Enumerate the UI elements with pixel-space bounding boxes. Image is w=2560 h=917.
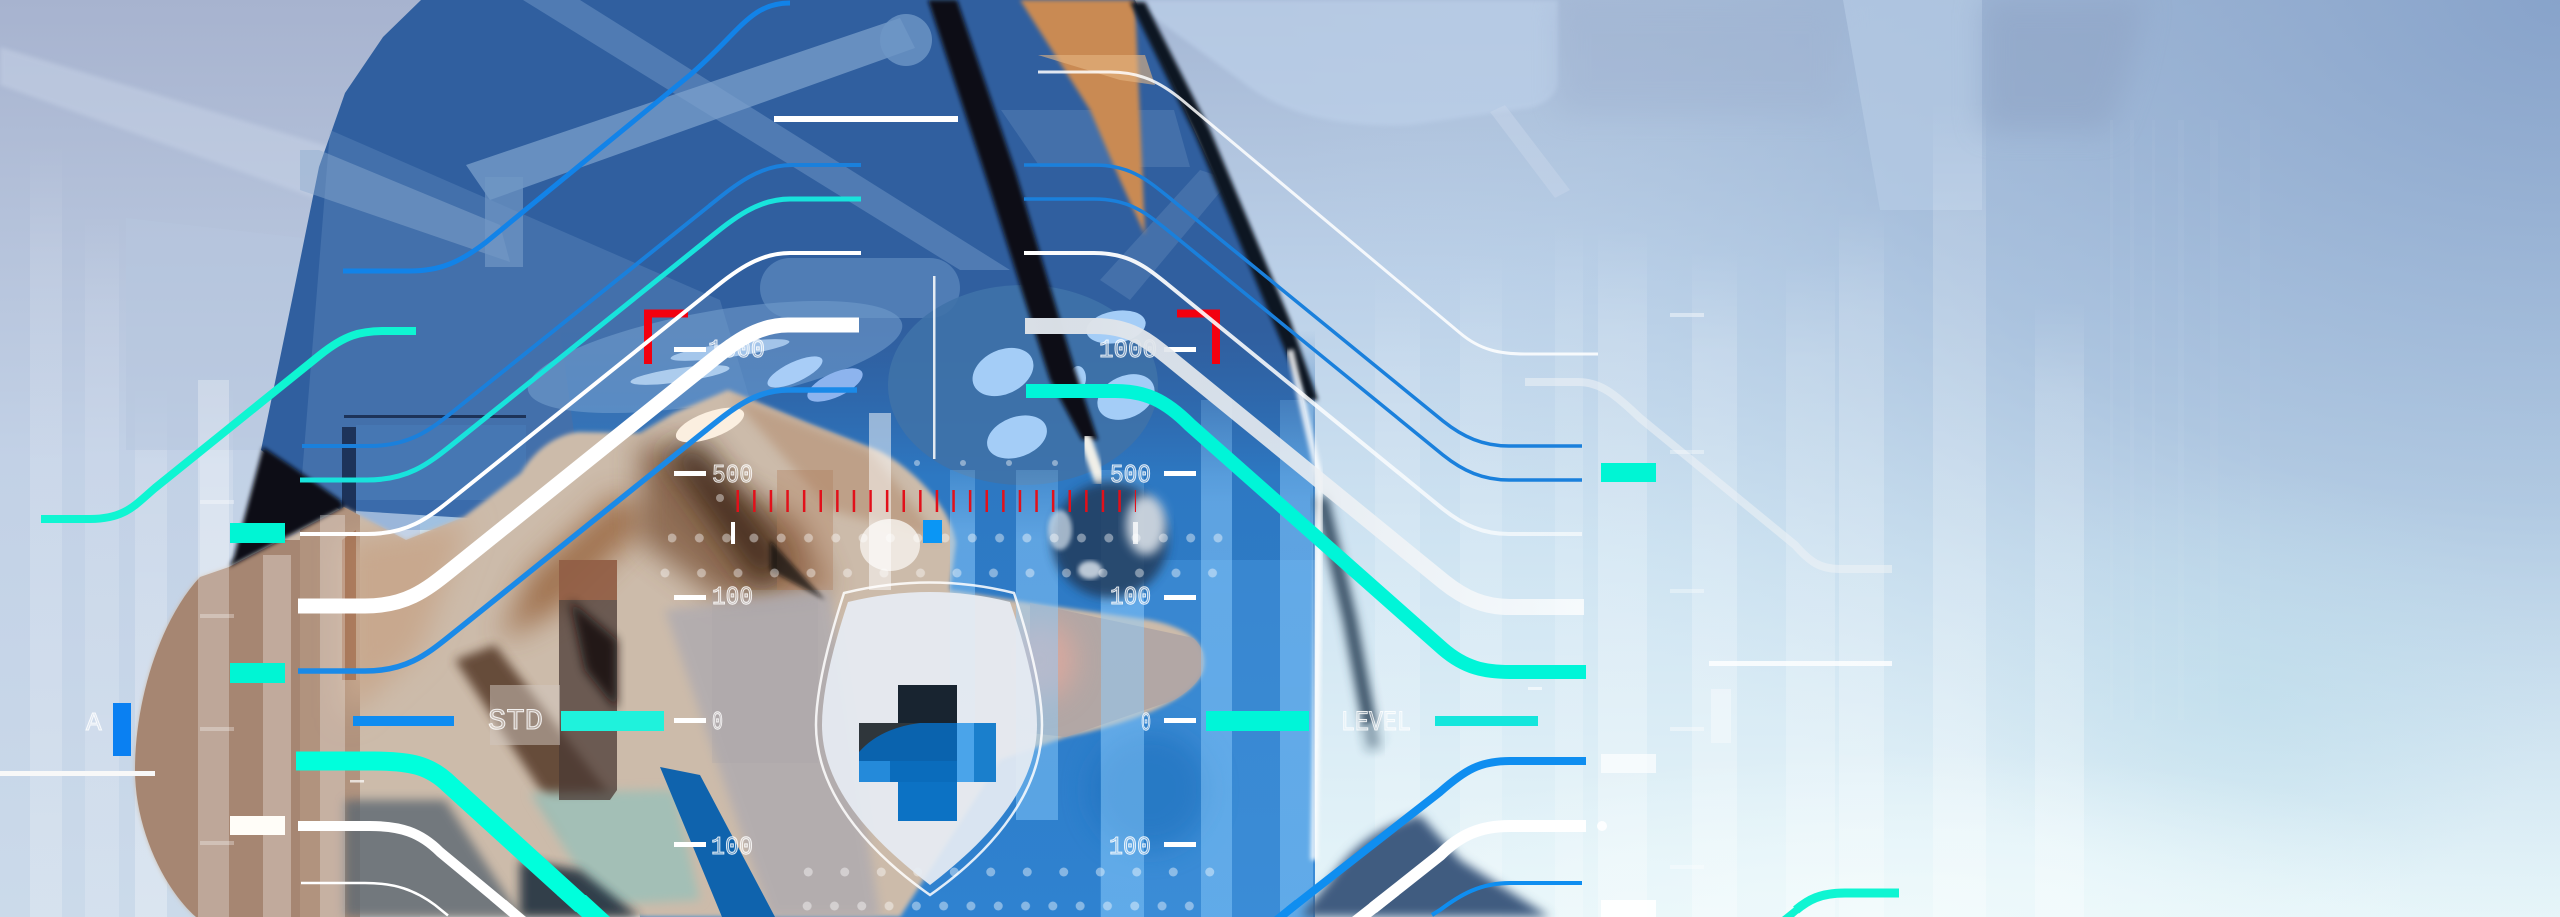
doctor body in blue scrubs <box>261 0 1315 917</box>
scale labels left: 100 <box>711 832 753 862</box>
red ruler <box>736 490 1136 512</box>
scale ticks left <box>674 347 706 847</box>
blue curve: upper left <box>302 165 861 446</box>
scale labels right: 500 <box>1110 460 1151 490</box>
second hand, blurred <box>1300 815 1550 917</box>
white curve lower left <box>298 826 526 917</box>
scale labels left: 1000 <box>708 335 765 365</box>
stethoscope <box>928 0 1390 860</box>
scale labels right: 1000 <box>1099 335 1157 365</box>
neck <box>1020 0 1155 235</box>
scale labels right <box>1099 335 1157 862</box>
cyan thick curve lower left <box>296 761 610 917</box>
white curve bottom right <box>1352 826 1586 917</box>
legend blocks left <box>230 523 285 835</box>
cyan curve: upper left <box>300 199 861 480</box>
scale labels right: 100 <box>1109 832 1151 862</box>
blue curve: top left <box>343 3 790 271</box>
dot grid <box>660 460 1230 917</box>
thick white curve left <box>298 325 859 606</box>
hand and pointing finger <box>130 390 1204 917</box>
scale labels left: 0 <box>712 707 723 737</box>
thin white curve lower left <box>301 883 448 916</box>
chart stripes over hand and scrubs <box>198 380 1313 917</box>
blue curve through hand <box>298 390 857 671</box>
cyan thick curve right <box>1026 391 1586 672</box>
text: LEVEL: LEVEL <box>1341 708 1411 739</box>
scale labels left: 500 <box>712 460 753 490</box>
thin blue curve bottom right <box>1432 883 1582 915</box>
cyan curve far left <box>41 331 416 519</box>
centre marker line <box>933 276 936 459</box>
surgical lamp: left <box>520 258 960 435</box>
background architecture shapes <box>1130 0 2260 720</box>
white curve right <box>1024 253 1582 534</box>
cyan curve bottom right <box>1782 893 1899 917</box>
scale labels right: 0 <box>1141 708 1151 738</box>
thick white curve right <box>1025 326 1584 607</box>
red focus bracket right <box>1177 314 1216 364</box>
white curve top right <box>1038 72 1598 354</box>
operating room overhead structure <box>300 0 1230 530</box>
blue curve right 1 <box>1024 165 1582 446</box>
white top bar <box>774 116 958 122</box>
shield icon with medical cross <box>816 582 1042 895</box>
white curve: upper left <box>300 253 861 534</box>
text: A: A <box>86 708 102 738</box>
text: STD: STD <box>488 705 543 739</box>
background vertical bars: right <box>1375 100 2084 917</box>
red focus bracket left <box>648 314 688 364</box>
scale ticks right <box>1164 347 1196 847</box>
legend blocks right <box>1597 463 1656 917</box>
STD and level bars <box>0 703 1538 776</box>
background vertical bars: left <box>30 140 320 917</box>
blue curve bottom right <box>1274 761 1586 917</box>
scale labels right: 100 <box>1110 582 1151 612</box>
blue scrub wedge beneath hand <box>660 767 775 917</box>
surgical lamp: right <box>888 285 1162 485</box>
pale curve far right <box>1525 382 1892 569</box>
scale labels left <box>708 335 765 862</box>
translucent panel over fingers <box>342 470 833 800</box>
far right marks <box>1528 313 1892 869</box>
ruler markers <box>731 520 1138 544</box>
dark shadow under sleeve <box>229 447 344 567</box>
far left marks <box>200 500 364 845</box>
scale labels left: 100 <box>712 582 753 612</box>
blue curve right 2 <box>1024 199 1582 480</box>
